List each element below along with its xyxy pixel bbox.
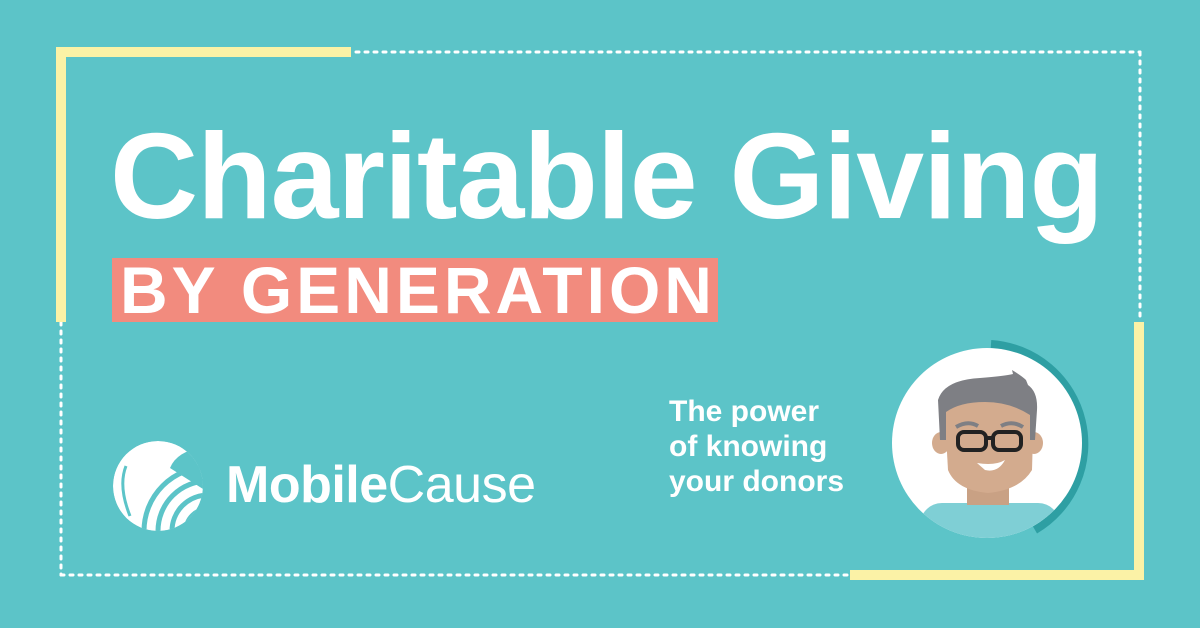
icon: globe [113,441,203,531]
face [944,400,1034,493]
hair [938,370,1037,440]
tagline: your donors [669,465,844,498]
glasses [958,432,1021,450]
arc ring [991,344,1084,530]
logo text: MobileCause [226,456,535,514]
neck [967,488,1009,505]
title: Charitable Giving [110,108,1103,244]
avatar [892,340,1088,538]
tagline: The power [669,395,819,428]
shirt [923,503,1054,538]
banner: by generation: BY GENERATION [120,253,716,327]
tagline: of knowing [669,430,827,463]
ears [932,432,947,454]
eyebrows [956,423,978,427]
tagline [669,395,844,498]
logo [113,441,535,531]
mouth [977,460,1005,471]
